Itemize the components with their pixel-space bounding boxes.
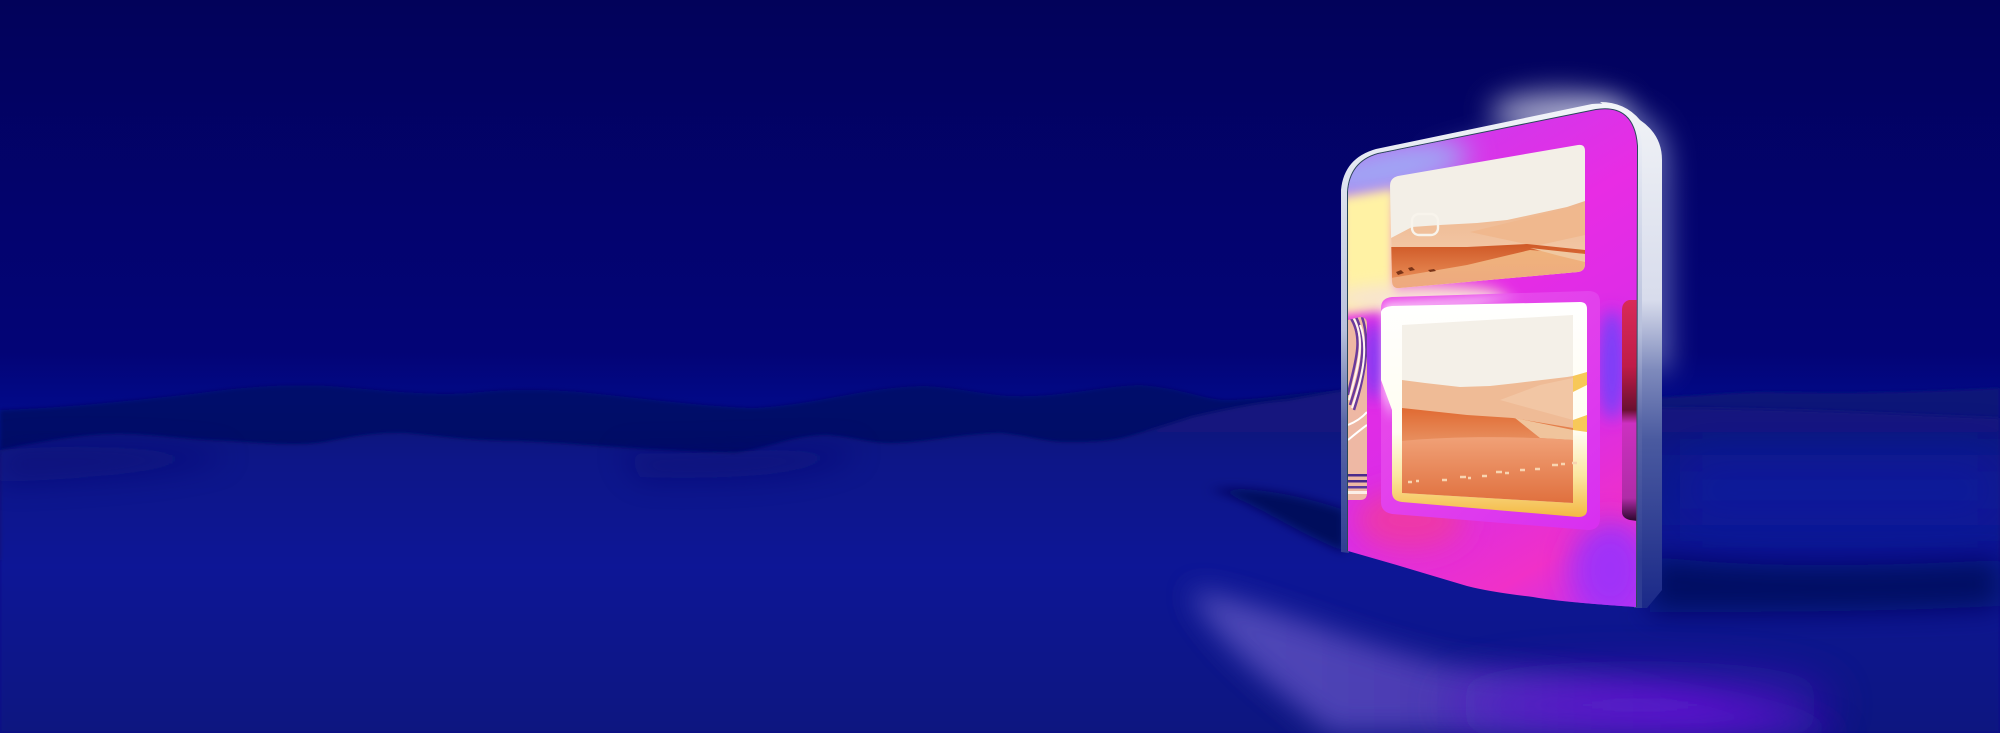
dunes: middle ground with swales <box>0 390 2000 733</box>
screen purple patches <box>1364 320 1384 400</box>
big card halo <box>1381 291 1600 530</box>
phone screen <box>1348 109 1637 607</box>
big card halo white highlight <box>1384 296 1520 420</box>
big card photo <box>1402 312 1573 510</box>
phone front bezel <box>1341 104 1642 608</box>
ground light to the right <box>1680 455 2000 525</box>
screen lavender corner <box>1348 135 1482 202</box>
screen left marble card <box>1348 317 1367 500</box>
light beam on sand <box>1190 590 1850 733</box>
phone <box>1341 102 1662 608</box>
top card selection ring <box>1410 225 1440 236</box>
phone glow <box>1420 92 1668 370</box>
desert footprints <box>1408 463 1577 482</box>
gold frame accents <box>1573 372 1587 432</box>
ground shadow right of phone <box>1650 556 2000 612</box>
phone side face <box>1600 102 1662 608</box>
top photo card <box>1385 140 1590 292</box>
dunes: distant dark ridge <box>0 385 2000 560</box>
screen yellow glow <box>1340 188 1395 315</box>
big card frame <box>1381 302 1587 517</box>
ground shadow left of phone <box>1208 489 1345 552</box>
phone screen edge line <box>1348 109 1637 607</box>
screen right red card <box>1622 300 1638 522</box>
